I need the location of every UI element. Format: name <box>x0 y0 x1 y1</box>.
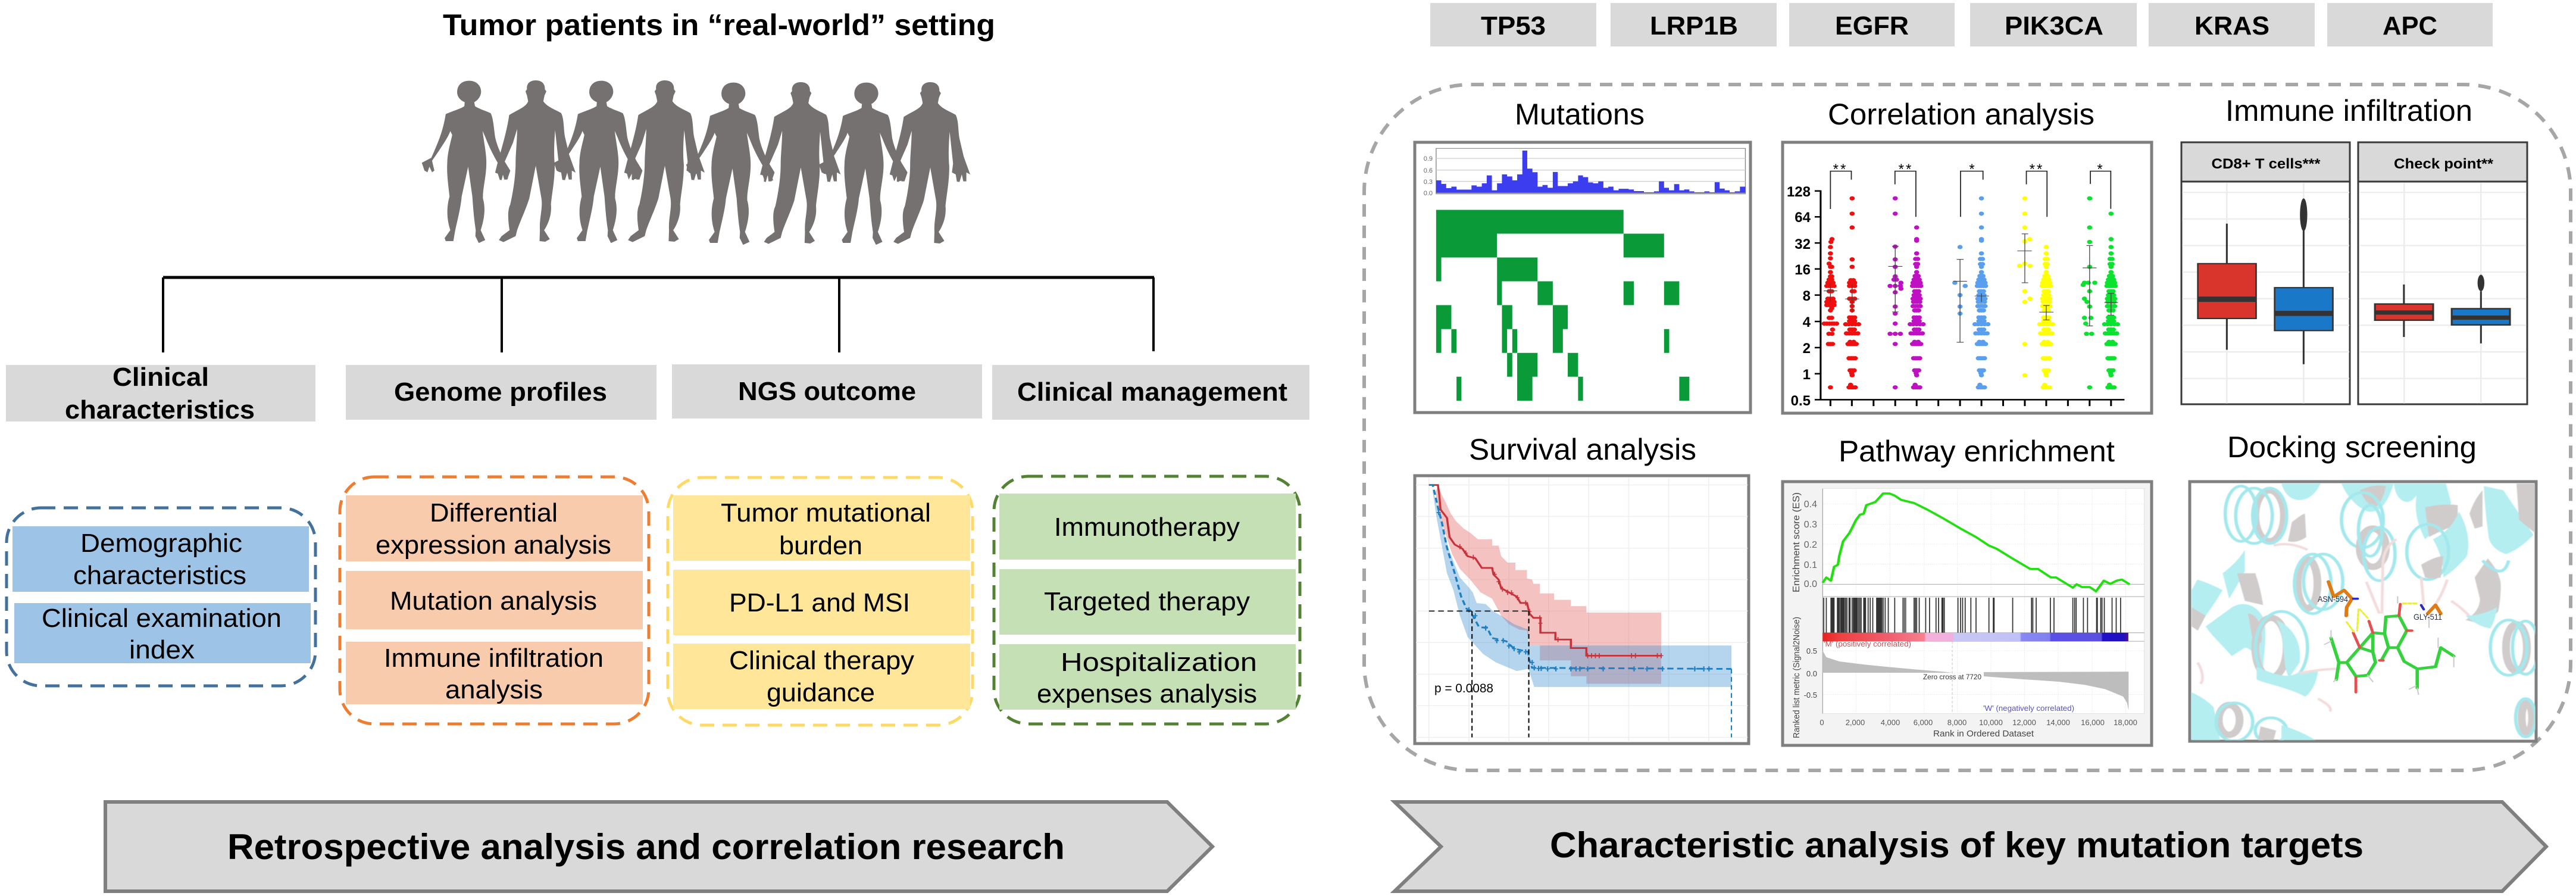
GSEA enrichment plot: 0.5 <box>1806 647 1817 655</box>
residue labels: GLY-511 <box>2414 612 2442 622</box>
GSEA enrichment plot: 6,000 <box>1914 718 1933 727</box>
GSEA enrichment plot: 0.3 <box>1804 520 1817 530</box>
panel: survival analysis <box>1415 433 1749 744</box>
panel: clinical characteristics items: Clinical examination <box>42 604 282 633</box>
panel: NGS outcome items: burden <box>779 531 862 560</box>
scatter dot plot: 0.5 <box>1791 393 1811 409</box>
category header: NGS outcome <box>672 364 982 419</box>
GSEA enrichment plot: 8,000 <box>1947 718 1967 727</box>
panel: clinical characteristics items: index <box>129 635 195 664</box>
arrow: characteristic analysis banner <box>1395 802 2546 891</box>
scatter dot plot: 8 <box>1803 288 1811 304</box>
docking frame <box>2190 482 2536 741</box>
scatter dot plot: * <box>1969 161 1975 177</box>
GSEA enrichment plot: 0.4 <box>1804 499 1817 510</box>
heading: Pathway enrichment: Pathway enrichment <box>1839 435 2115 468</box>
category header: Clinical characteristics: Clinical <box>112 363 209 392</box>
GSEA enrichment plot: 14,000 <box>2046 718 2070 727</box>
GSEA enrichment plot: 'M' (positively correlated) <box>1824 640 1911 648</box>
correlation frame <box>1783 142 2152 413</box>
category header: Clinical management: Clinical management <box>1017 377 1287 407</box>
title: Tumor patients in “real-world” setting <box>443 8 995 42</box>
panel: clinical management items: Hospitalization <box>1061 648 1257 677</box>
GSEA enrichment plot: 0.0 <box>1804 579 1817 589</box>
GSEA enrichment plot: Rank in Ordered Dataset <box>1933 729 2034 739</box>
scatter dot plot: 32 <box>1795 236 1811 252</box>
ligand molecule <box>2324 582 2454 694</box>
GSEA enrichment plot: 0.2 <box>1804 540 1817 550</box>
GSEA enrichment plot: 12,000 <box>2012 718 2036 727</box>
GSEA enrichment plot: 2,000 <box>1846 718 1865 727</box>
GSEA enrichment plot: 16,000 <box>2081 718 2105 727</box>
mutation burden bar chart: 0.3 <box>1424 179 1433 186</box>
GSEA enrichment plot: Zero cross at 7720 <box>1923 673 1981 681</box>
GSEA enrichment plot: -0.5 <box>1804 691 1817 700</box>
category header: Clinical characteristics: characteristics <box>65 395 255 424</box>
panel: clinical management items: Immunotherapy <box>1054 513 1240 542</box>
GSEA enrichment plot: 'W' (negatively correlated) <box>1983 704 2074 713</box>
tree connector lines <box>163 277 1154 352</box>
panel: docking screening <box>2190 430 2539 744</box>
scatter dot plot: ** <box>1899 161 1913 177</box>
panel: NGS outcome items <box>668 477 973 725</box>
arrow: retrospective analysis banner <box>105 802 1212 891</box>
panel: clinical management items: Targeted therapy <box>1044 587 1250 616</box>
scatter dot plot: 128 <box>1787 184 1811 200</box>
panel: clinical management items <box>994 476 1300 724</box>
GSEA enrichment plot: 0.1 <box>1804 560 1817 570</box>
category header: Clinical characteristics <box>6 363 315 424</box>
GSEA enrichment plot: 0 <box>1820 718 1824 727</box>
heading: Mutations: Mutations <box>1515 98 1645 131</box>
scatter dot plot: 4 <box>1803 314 1811 330</box>
gene tags: KRAS <box>2194 11 2269 40</box>
Kaplan-Meier chart <box>1416 477 1747 742</box>
axes <box>1815 191 2124 406</box>
GSEA enrichment plot: 4,000 <box>1881 718 1900 727</box>
category header: Clinical management <box>992 365 1309 420</box>
boxplot facet: Check point: Check point** <box>2394 156 2494 172</box>
scatter dot plot: 16 <box>1795 262 1811 278</box>
panel: genome profile items: Mutation analysis <box>390 586 597 616</box>
category header: NGS outcome: NGS outcome <box>738 377 916 406</box>
panel: clinical characteristics items: Demographic <box>80 529 242 558</box>
mutation burden bar chart: 0.0 <box>1424 190 1433 197</box>
mutations frame <box>1415 142 1750 413</box>
scatter dot plot <box>1787 161 2124 409</box>
panel: NGS outcome items: Tumor mutational <box>721 498 931 527</box>
panel: correlation analysis <box>1783 98 2152 413</box>
heading: Immune infiltration: Immune infiltration <box>2225 94 2472 127</box>
boxplot facet: Check point <box>2358 142 2527 404</box>
p value: p = 0.0088 <box>1434 682 1493 695</box>
GSEA enrichment plot: 18,000 <box>2114 718 2137 727</box>
GSEA enrichment plot: 10,000 <box>1979 718 2003 727</box>
panel: immune infiltration <box>2181 94 2527 404</box>
category header: Genome profiles: Genome profiles <box>394 377 607 407</box>
scatter dot plot: ** <box>1833 161 1847 177</box>
panel: genome profile items <box>340 477 649 724</box>
category header: Genome profiles <box>346 365 656 420</box>
icon: group of patient silhouettes <box>422 80 970 245</box>
significance brackets <box>1830 171 2111 217</box>
panel: NGS outcome items: Clinical therapy <box>729 646 914 675</box>
scatter dot plot: 1 <box>1803 367 1811 383</box>
gene tags <box>1430 3 2493 46</box>
boxplot facet: CD8+ T cells <box>2181 142 2350 404</box>
panel: genome profile items: Immune infiltration <box>384 644 604 673</box>
mutation burden bar chart: 0.6 <box>1424 167 1433 174</box>
scatter dot plot: * <box>2097 161 2103 177</box>
large dashed container <box>1364 85 2571 770</box>
panel: clinical characteristics items <box>7 508 315 686</box>
panel: genome profile items: analysis <box>445 675 543 704</box>
panel: genome profile items: expression analysis <box>376 530 611 560</box>
gene tags: PIK3CA <box>2005 11 2103 40</box>
mutation burden bar chart: 0.9 <box>1424 155 1433 163</box>
panel: genome profile items: Differential <box>430 498 558 527</box>
residue labels <box>2318 594 2442 622</box>
GSEA enrichment plot <box>1792 489 2144 739</box>
arrow: characteristic analysis banner: Characteristic analysis of key mutation targets <box>1550 825 2364 865</box>
scatter dot plot: 2 <box>1803 341 1811 357</box>
mutation burden bar chart <box>1424 148 1745 197</box>
panel: NGS outcome items: PD-L1 and MSI <box>729 588 910 617</box>
heading: Survival analysis: Survival analysis <box>1469 433 1696 466</box>
protein ribbon structure <box>2192 483 2539 744</box>
oncoprint heatmap <box>1436 210 1689 401</box>
gene tags: LRP1B <box>1650 11 1738 40</box>
panel: pathway enrichment <box>1783 435 2152 745</box>
scatter dot plot: 64 <box>1795 210 1811 226</box>
heading: Docking screening: Docking screening <box>2227 430 2477 464</box>
boxplot facet: CD8+ T cells: CD8+ T cells*** <box>2212 156 2321 172</box>
gene tags: EGFR <box>1835 11 1909 40</box>
arrow: retrospective analysis banner: Retrospective analysis and correlation research <box>227 827 1065 867</box>
panel: mutations <box>1415 98 1750 413</box>
enrichment frame <box>1783 482 2152 745</box>
scatter dot plot: ** <box>2030 161 2044 177</box>
gene tags: TP53 <box>1481 11 1546 40</box>
heading: Correlation analysis: Correlation analysis <box>1828 98 2094 131</box>
residue labels: ASN-594 <box>2318 594 2348 604</box>
GSEA enrichment plot: Ranked list metric (Signal2Noise) <box>1792 617 1802 738</box>
survival frame <box>1415 476 1749 744</box>
GSEA enrichment plot: Enrichment score (ES) <box>1792 492 1802 592</box>
GSEA enrichment plot: 0.0 <box>1806 669 1817 678</box>
gene tags: APC <box>2383 11 2437 40</box>
panel: clinical characteristics items: characteristics <box>73 561 246 590</box>
panel: clinical management items: expenses analysis <box>1037 679 1257 708</box>
panel: NGS outcome items: guidance <box>767 678 875 707</box>
